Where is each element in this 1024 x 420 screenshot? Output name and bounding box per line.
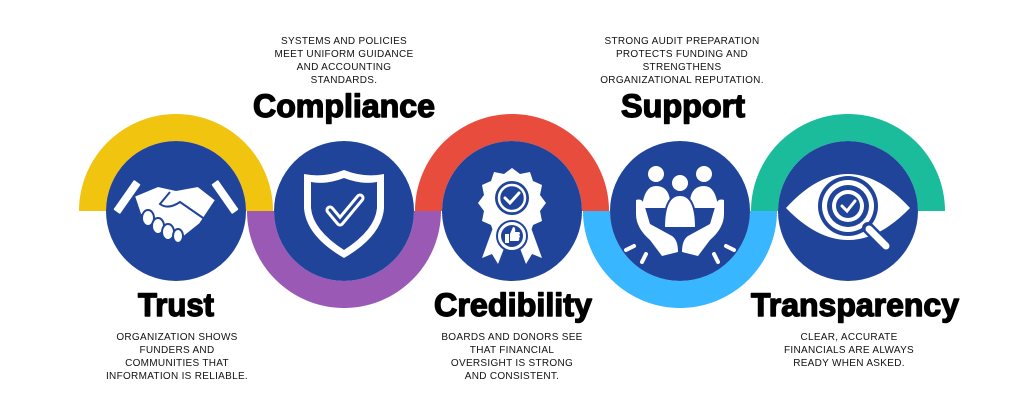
text: compliance description: STANDARDS. <box>311 75 377 86</box>
text: trust description: ORGANIZATION SHOWS <box>116 332 238 343</box>
arc: light blue bottom support <box>583 211 777 308</box>
text: credibility description: THAT FINANCIAL <box>470 345 554 356</box>
title: Credibility: Credibility <box>434 287 592 323</box>
text: credibility description: OVERSIGHT IS STRONG <box>451 358 573 369</box>
text: transparency description: FINANCIALS ARE ALWAYS <box>784 345 914 356</box>
text: credibility description: BOARDS AND DONORS SEE <box>441 332 583 343</box>
text: support description: STRONG AUDIT PREPARATION <box>604 36 760 47</box>
icon circle: compliance shield <box>274 141 414 281</box>
arc: yellow top trust <box>79 114 273 211</box>
icon circle: transparency eye <box>778 141 918 281</box>
arc: purple bottom compliance <box>247 211 441 308</box>
text: transparency description: READY WHEN ASKED. <box>793 358 905 369</box>
text: support description: ORGANIZATIONAL REPUTATION. <box>600 75 764 86</box>
text: support description: STRENGTHENS <box>643 62 721 73</box>
text: trust description: INFORMATION IS RELIABLE. <box>106 371 248 382</box>
title: Compliance: Compliance <box>253 88 435 124</box>
title: Trust: Trust <box>138 287 214 323</box>
text: trust description: FUNDERS AND <box>140 345 214 356</box>
icon circle: trust handshake <box>106 141 246 281</box>
text: compliance description: AND ACCOUNTING <box>297 62 391 73</box>
title: Transparency: Transparency <box>751 287 959 323</box>
arc: red top credibility <box>415 114 609 211</box>
icon circle: credibility badge <box>442 141 582 281</box>
title: Support: Support <box>621 88 745 124</box>
text: credibility description: AND CONSISTENT. <box>465 371 559 382</box>
text: transparency description: CLEAR, ACCURATE <box>800 332 898 343</box>
text: trust description: COMMUNITIES THAT <box>125 358 229 369</box>
icon circle: support hands <box>610 141 750 281</box>
text: compliance description: SYSTEMS AND POLICIES <box>281 36 407 47</box>
text: compliance description: MEET UNIFORM GUIDANCE <box>275 49 413 60</box>
arc: teal top transparency <box>751 114 945 211</box>
text: support description: PROTECTS FUNDING AND <box>616 49 748 60</box>
